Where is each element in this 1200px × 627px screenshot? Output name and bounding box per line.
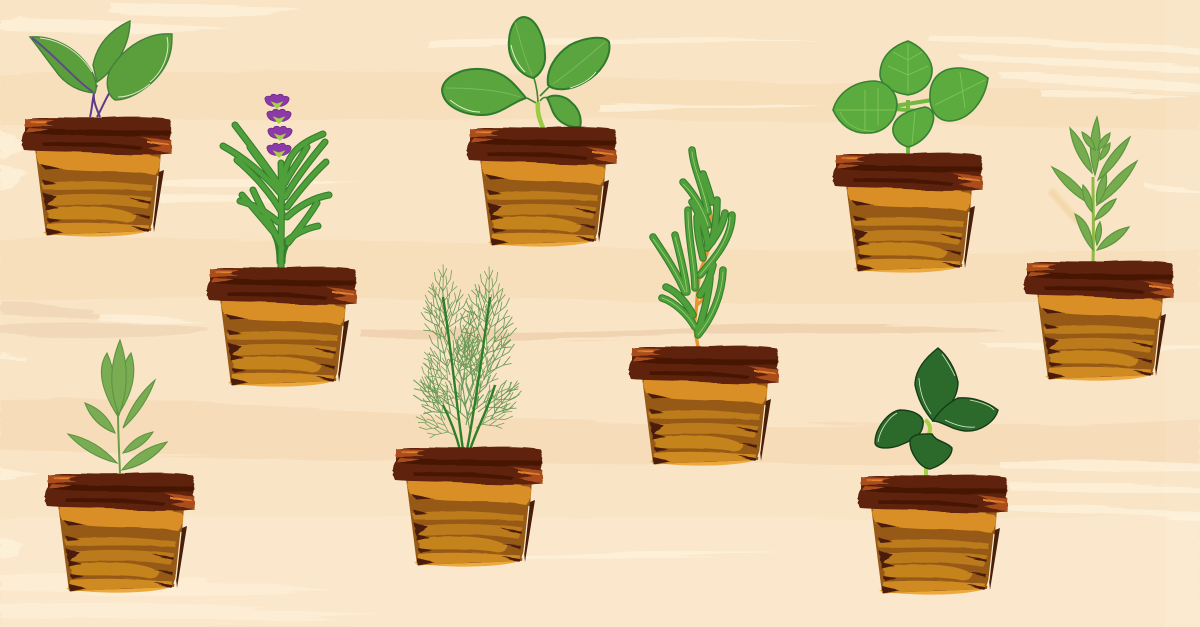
- pot: [833, 153, 983, 273]
- plant 6: narrow-leaf herb in pot: [45, 340, 195, 593]
- stems: [895, 100, 932, 154]
- blades: [223, 125, 329, 268]
- needles: [653, 150, 732, 335]
- plant 5: tarragon in pot: [1024, 117, 1174, 381]
- plant 9: dark oregano in pot: [858, 348, 1008, 595]
- flower spikes: [265, 94, 292, 157]
- plant 8: rosemary in pot: [629, 150, 779, 466]
- plant 7: dill in pot: [393, 264, 543, 567]
- leaves: [833, 41, 988, 147]
- main stalks: [443, 297, 495, 450]
- feathery fronds: [401, 264, 530, 447]
- plant 3: round-leaf herb in pot: [442, 17, 617, 247]
- pot: [629, 346, 779, 466]
- leaves: [875, 348, 998, 469]
- stem: [118, 412, 120, 473]
- stem: [922, 420, 930, 477]
- leaves: [68, 340, 167, 470]
- pot: [393, 447, 543, 567]
- leaves: [442, 17, 609, 127]
- pot: [45, 473, 195, 593]
- pot: [467, 127, 617, 247]
- pot: [858, 475, 1008, 595]
- pot: [22, 117, 172, 237]
- stems: [527, 78, 550, 105]
- pot: [207, 267, 357, 387]
- pot: [1024, 261, 1174, 381]
- leaves: [1052, 117, 1137, 250]
- stem: [1092, 177, 1095, 262]
- plant 1: sage seedling in pot: [22, 21, 172, 237]
- woody stem: [694, 185, 712, 347]
- plant 4: basil in pot: [833, 41, 988, 273]
- stems: purple: [90, 85, 111, 117]
- plant 2: lavender in pot: [207, 94, 357, 387]
- leaves: sage: [30, 21, 172, 100]
